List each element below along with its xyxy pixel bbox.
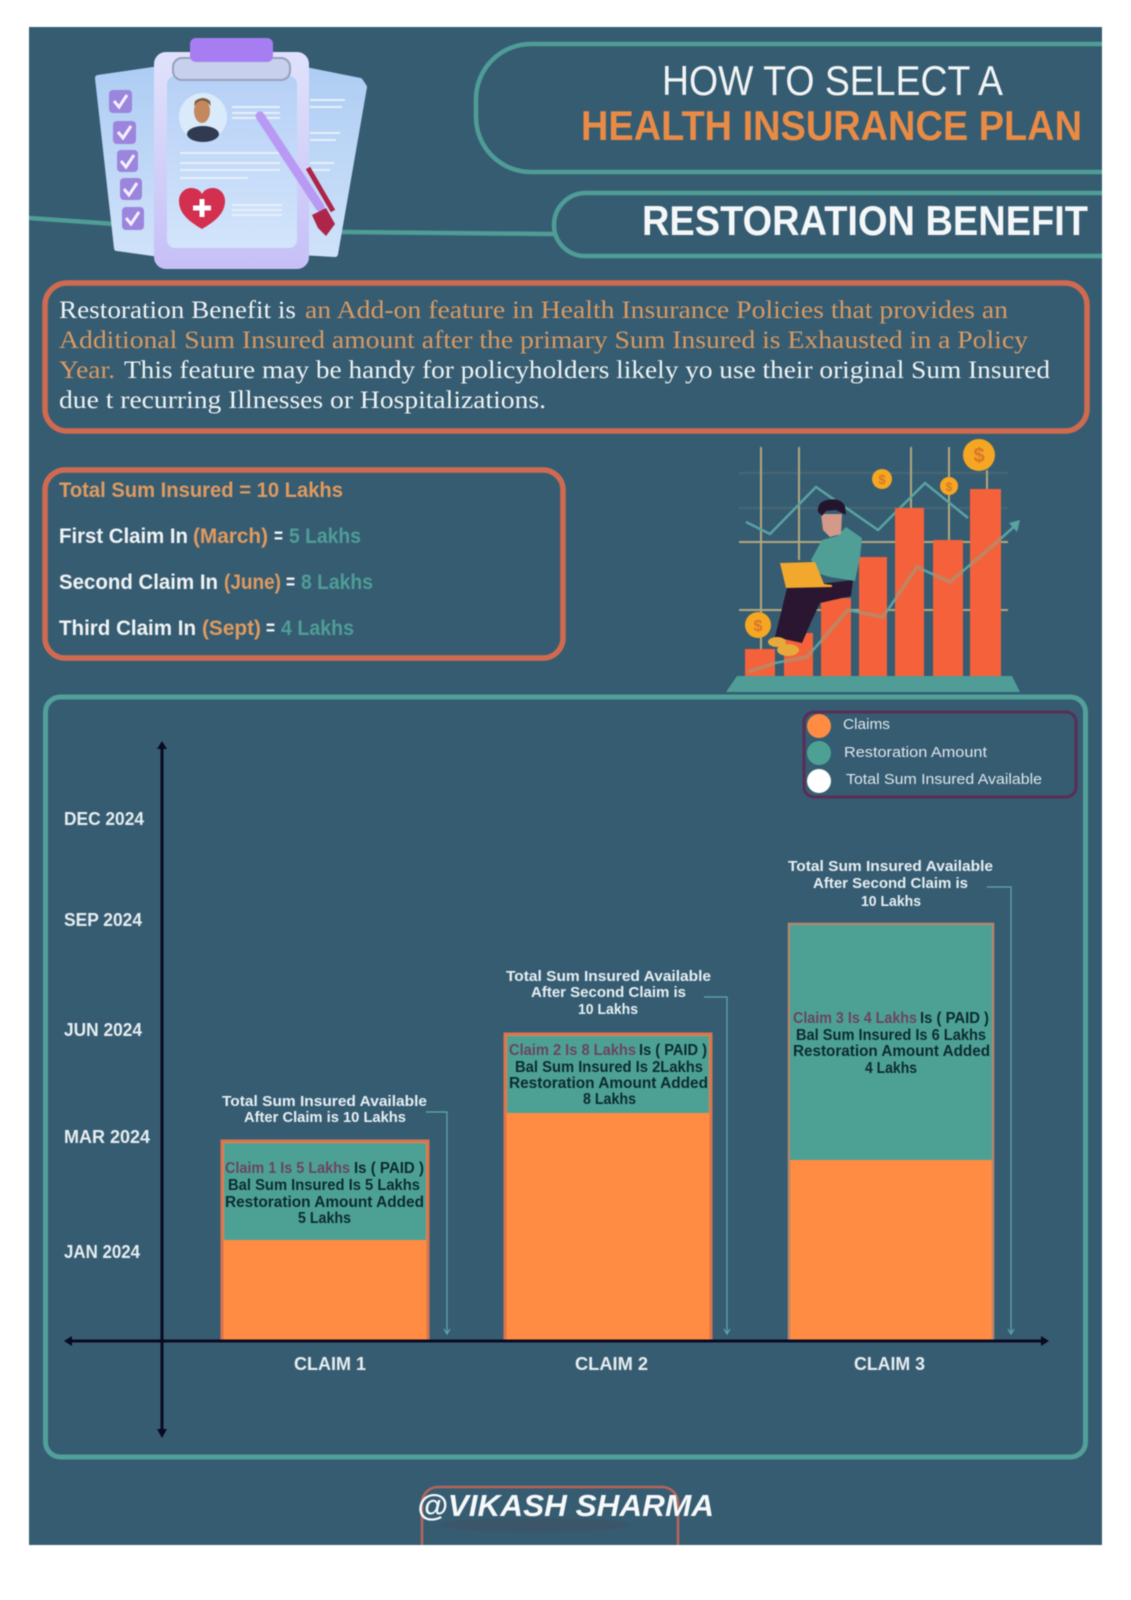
bar: claim 1: Bal Sum Insured Is 5 Lakhs: [228, 1177, 420, 1194]
bar: claim 2: [505, 1034, 711, 1341]
y axis labels: SEP 2024: [64, 910, 142, 930]
bar: claim 1: Restoration Amount Added: [225, 1194, 424, 1211]
icon: person on growth chart: $: [946, 480, 953, 494]
label: claim 2 total: 10 Lakhs: [578, 1001, 638, 1018]
bar: claim 2: 8 Lakhs: [583, 1091, 636, 1108]
second claim: 8 Lakhs: [301, 571, 373, 594]
bar: claim 3: [789, 924, 993, 1341]
label: claim 3 total: [788, 858, 993, 910]
connector line left: [29, 218, 115, 224]
label: claim 1 total: Total Sum Insured Available: [222, 1093, 427, 1110]
x axis labels: CLAIM 1: [294, 1354, 366, 1374]
label: claim 1 total: After Claim is 10 Lakhs: [244, 1109, 406, 1126]
subtitle: RESTORATION BENEFIT: [642, 197, 1088, 244]
bar: claim 3: Claim 3 Is 4 Lakhs: [793, 1010, 917, 1027]
legend: Claims: [843, 716, 890, 733]
third claim: [59, 617, 354, 640]
bar: claim 2: Claim 2 Is 8 Lakhs: [509, 1042, 636, 1059]
first claim: =: [274, 525, 283, 548]
bar: claim 1: Claim 1 Is 5 Lakhs: [225, 1160, 350, 1177]
legend: [804, 712, 1076, 797]
bar: claim 1: Is ( PAID ): [354, 1160, 424, 1177]
icon: person on growth chart: $: [754, 618, 763, 635]
first claim: [59, 525, 361, 548]
total sum insured: Total Sum Insured = 10 Lakhs: [59, 479, 343, 502]
icon: medical clipboard: [98, 38, 364, 269]
first claim: 5 Lakhs: [289, 525, 361, 548]
third claim: 4 Lakhs: [281, 617, 354, 640]
third claim: Third Claim In: [59, 617, 196, 640]
arrow: claim 3 bracket: [987, 887, 1014, 1334]
title: HOW TO SELECT A: [662, 57, 1003, 104]
label: claim 2 total: After Second Claim is: [531, 984, 686, 1001]
second claim: (June): [224, 571, 281, 594]
title pill outline: [476, 44, 1102, 172]
first claim: (March): [193, 525, 268, 548]
definition text: This feature may be handy for policyholders likely yo use their original Sum Insured: [124, 357, 1051, 384]
label: claim 3 total: After Second Claim is: [813, 875, 968, 892]
icon: person on growth chart: $: [878, 472, 886, 487]
title: [581, 57, 1082, 149]
second claim: [59, 571, 373, 594]
bar: claim 1: 5 Lakhs: [298, 1210, 351, 1227]
definition text: due t recurring Illnesses or Hospitalizations.: [59, 387, 546, 414]
bar: claim 2: Restoration Amount Added: [509, 1075, 708, 1092]
label: claim 3 total: 10 Lakhs: [861, 893, 921, 910]
bar: claim 3: 4 Lakhs: [865, 1060, 917, 1077]
second claim: Second Claim In: [59, 571, 218, 594]
footer smudge: [440, 1518, 630, 1532]
y axis labels: JUN 2024: [64, 1020, 142, 1040]
x axis labels: [294, 1354, 925, 1374]
second claim: =: [286, 571, 295, 594]
third claim: =: [266, 617, 275, 640]
panel: claims chart: [46, 697, 1086, 1457]
x axis labels: CLAIM 2: [575, 1354, 648, 1374]
bar: claim 3: Restoration Amount Added: [793, 1043, 990, 1060]
y axis arrow: [157, 741, 167, 1438]
first claim: First Claim In: [59, 525, 188, 548]
arrow: claim 1 bracket: [426, 1112, 450, 1334]
title: HEALTH INSURANCE PLAN: [581, 102, 1082, 149]
bar: claim 2: Bal Sum Insured Is 2Lakhs: [515, 1059, 703, 1076]
icon: person on growth chart: $: [973, 445, 985, 467]
x axis labels: CLAIM 3: [854, 1354, 925, 1374]
x axis arrow: [64, 1336, 1049, 1346]
bar: claim 3: Bal Sum Insured Is 6 Lakhs: [796, 1027, 986, 1044]
third claim: (Sept): [202, 617, 261, 640]
icon: person on growth chart: [726, 439, 1020, 692]
label: claim 3 total: Total Sum Insured Available: [788, 858, 993, 875]
subtitle pill outline: [554, 193, 1102, 256]
y axis labels: DEC 2024: [64, 809, 144, 829]
footer author: @VIKASH SHARMA: [417, 1488, 714, 1523]
definition text: [59, 297, 1051, 414]
footer tag outline: [422, 1487, 678, 1545]
panel: claim summary: [45, 470, 563, 658]
bar: claim 1: [222, 1141, 428, 1341]
bar: claim 3: Is ( PAID ): [920, 1010, 989, 1027]
arrow: claim 2 bracket: [704, 997, 730, 1334]
definition text: Restoration Benefit is: [59, 297, 296, 324]
label: claim 1 total: [222, 1093, 427, 1126]
label: claim 2 total: [506, 968, 711, 1018]
label: claim 2 total: Total Sum Insured Available: [506, 968, 711, 985]
bar: claim 2: Is ( PAID ): [639, 1042, 707, 1059]
definition text: Additional Sum Insured amount after the primary Sum Insured is Exhausted in a Policy: [59, 327, 1029, 354]
y axis labels: JAN 2024: [64, 1242, 140, 1262]
connector line right: [340, 232, 554, 234]
panel: definition: [45, 283, 1087, 431]
y axis labels: MAR 2024: [64, 1127, 150, 1147]
definition text: an Add-on feature in Health Insurance Policies that provides an: [305, 297, 1009, 324]
definition text: Year.: [59, 357, 115, 384]
legend: Restoration Amount: [844, 744, 988, 761]
y axis labels: [64, 809, 150, 1262]
legend: Total Sum Insured Available: [846, 771, 1042, 788]
